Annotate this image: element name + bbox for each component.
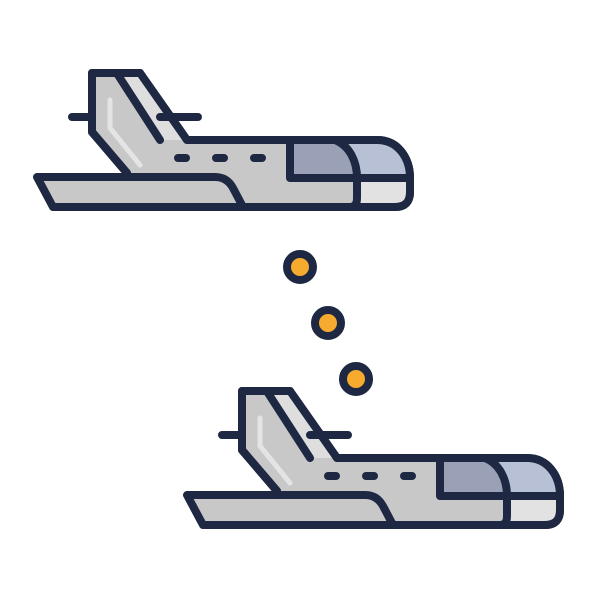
cockpit window xyxy=(290,140,355,178)
plane: bottom xyxy=(187,391,560,525)
fuselage xyxy=(92,73,410,207)
coins falling xyxy=(287,254,369,392)
coin 2 xyxy=(315,310,341,336)
plane: top xyxy=(37,73,410,207)
windows xyxy=(178,154,262,162)
windows xyxy=(328,472,412,480)
wing xyxy=(187,495,393,525)
tail stripe xyxy=(268,391,337,458)
coin 1 xyxy=(287,254,313,280)
nose upper xyxy=(345,140,410,178)
stabilizer xyxy=(222,431,348,439)
coin 3 xyxy=(343,366,369,392)
nose lower xyxy=(360,178,410,207)
tail stripe xyxy=(118,73,187,140)
nose upper xyxy=(495,458,560,496)
wing xyxy=(37,177,243,207)
stabilizer xyxy=(72,113,198,121)
cockpit window xyxy=(440,458,505,496)
nose lower xyxy=(510,496,560,525)
fuselage xyxy=(242,391,560,525)
